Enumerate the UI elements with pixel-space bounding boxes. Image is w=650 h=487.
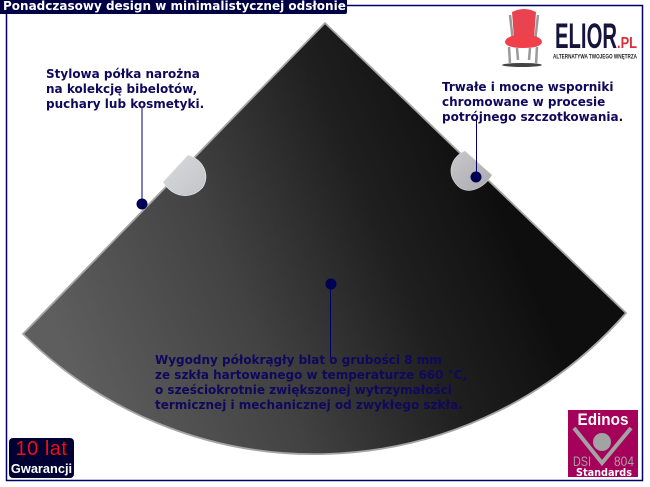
callout: chrome supports: Trwałe i mocne wsporniki (442, 80, 613, 94)
pointer: right callout (470, 120, 482, 182)
badge: Edinos DSI 804 Standards: Edinos (578, 410, 628, 429)
callout: glass top (155, 353, 467, 412)
callout: glass top: o sześciokrotnie zwiększonej wytrzymałości (155, 383, 452, 397)
callout: glass top: ze szkła hartowanego w temperaturze 660 °C, (155, 368, 467, 382)
callout: glass top: termicznej i mechanicznej od zwykłego szkła. (155, 398, 463, 412)
pointer: shelf callout (326, 278, 336, 358)
callout: shelf style (46, 67, 204, 111)
badge: Edinos DSI 804 Standards: DSI (573, 453, 591, 469)
right chrome bracket (451, 151, 492, 190)
badge: Edinos DSI 804 Standards: 804 (614, 453, 634, 469)
callout: shelf style: na kolekcję bibelotów, (46, 82, 197, 96)
badge: 10 year warranty (9, 438, 74, 478)
callout: chrome supports: chromowane w procesie (442, 95, 605, 109)
logo: Elior chair and wordmark (502, 9, 637, 67)
callout: glass top: Wygodny półokrągły blat o grubości 8 mm (155, 353, 442, 367)
callout: shelf style: Stylowa półka narożna (46, 67, 200, 81)
badge: 10 year warranty: 10 lat (16, 438, 67, 460)
badge: 10 year warranty: Gwarancji (11, 461, 72, 476)
pointer: left callout (136, 107, 148, 210)
left chrome bracket (163, 155, 206, 196)
badge: Edinos DSI 804 Standards (568, 410, 638, 477)
callout: chrome supports: potrójnego szczotkowania. (442, 110, 623, 124)
icon: chair (502, 9, 542, 67)
callout: shelf style: puchary lub kosmetyki. (46, 97, 204, 111)
callout: chrome supports (442, 80, 623, 124)
